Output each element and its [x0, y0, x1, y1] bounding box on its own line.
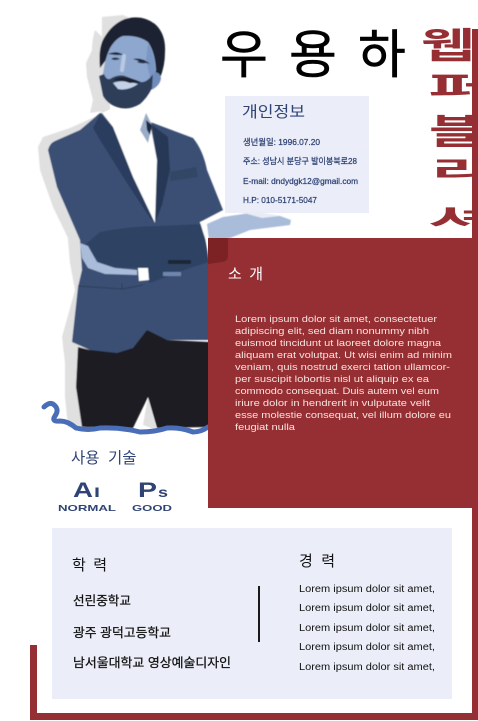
text block: introduction body: adipiscing elit, sed diam nonummy nibh: [235, 326, 429, 337]
text block: introduction body: feugiat nulla: [235, 422, 296, 433]
panel: personal info text: [242, 103, 358, 205]
skills section: I: [94, 484, 100, 500]
person photo illustration: [38, 15, 291, 430]
skill level: good: GOOD: [132, 503, 172, 513]
text block: introduction body: per suscipit lobortis nisl ut aliquip ex ea: [235, 374, 430, 385]
career list: Lorem ipsum dolor sit amet,: [299, 662, 435, 673]
education list: 광주 광덕고등학교: [73, 626, 171, 640]
skills section: s: [158, 484, 168, 500]
info panel background: [225, 96, 369, 213]
heading: career: 경 력: [299, 553, 335, 570]
panel: personal info text: E-mail: dndydgk12@gmail.com: [243, 176, 358, 186]
vertical title: web publisher: 셔: [428, 204, 478, 235]
panel: personal info text: H.P: 010-5171-5047: [243, 195, 317, 205]
vertical title: web publisher: 웹: [421, 25, 475, 66]
title: name: 용: [289, 27, 337, 85]
skill: AI: A: [73, 479, 93, 502]
panel: introduction: [208, 238, 478, 508]
career list: [299, 584, 435, 673]
education list: [73, 594, 231, 670]
heading: introduction: 소 개: [228, 266, 263, 283]
page frame bottom: [30, 508, 478, 720]
title: name: 하: [358, 27, 406, 85]
text block: introduction body: iriure dolor in hendrerit in vulputate velit: [235, 398, 430, 409]
text block: introduction body: Lorem ipsum dolor sit amet, consectetuer: [235, 314, 437, 325]
text block: introduction body: veniam, quis nostrud exerci tation ullamcor-: [235, 362, 450, 373]
panel: personal info text: 주소: 성남시 분당구 발이봉북로28: [243, 156, 357, 166]
education list: 선린중학교: [73, 594, 131, 608]
heading: education: 학 력: [72, 557, 107, 574]
vertical title: web publisher: 블: [429, 113, 478, 152]
vertical title: web publisher: 리: [431, 156, 478, 187]
panel: personal info text: 생년월일: 1996.07.20: [243, 137, 320, 147]
skill level: normal: NORMAL: [58, 503, 116, 513]
heading: skills: 사용: [71, 449, 100, 467]
text block: introduction body: aliquam erat volutpat. Ut wisi enim ad minim: [235, 350, 452, 361]
skills section: 기술: [108, 449, 137, 467]
education list: 남서울대학교 영상예술디자인: [73, 656, 231, 670]
skills section: [58, 449, 172, 513]
career list: Lorem ipsum dolor sit amet,: [299, 584, 435, 595]
title: name: 우: [220, 27, 268, 85]
divider line: [258, 586, 260, 642]
panel: education and career: [52, 528, 452, 699]
text block: introduction body: [235, 314, 452, 433]
career list: Lorem ipsum dolor sit amet,: [299, 623, 435, 634]
skill: Ps: P: [138, 479, 157, 502]
text block: introduction body: esse molestie consequat, vel illum dolore eu: [235, 410, 451, 421]
text block: introduction body: commodo consequat. Duis autem vel eum: [235, 386, 439, 397]
vertical title: web publisher: [421, 25, 478, 235]
title: name: [220, 27, 406, 85]
career list: Lorem ipsum dolor sit amet,: [299, 642, 435, 653]
page frame top right: [472, 29, 478, 238]
text block: introduction body: euismod tincidunt ut laoreet dolore magna: [235, 338, 442, 349]
decorative wave line: [44, 403, 208, 432]
heading: personal info: 개인정보: [242, 103, 305, 121]
vertical title: web publisher: 퍼: [428, 70, 478, 106]
career list: Lorem ipsum dolor sit amet,: [299, 603, 435, 614]
